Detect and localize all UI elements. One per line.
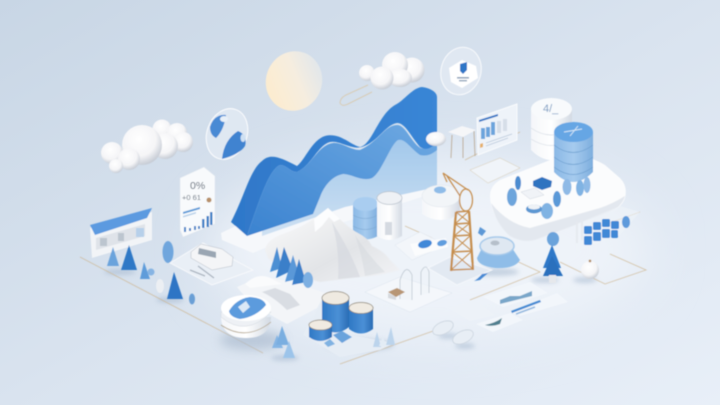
- sun disc: [257, 43, 331, 119]
- blue cube array: [576, 206, 640, 252]
- left cloud: [101, 120, 193, 173]
- white ball on glass platform: [581, 260, 599, 279]
- floor glow: [210, 160, 650, 340]
- house: [90, 208, 152, 258]
- bottom stat cards: [448, 273, 568, 332]
- floating badge: [435, 43, 487, 99]
- snow bowl: [220, 295, 284, 350]
- snow plateau: [237, 276, 334, 324]
- round white building: [422, 185, 460, 220]
- cylinder label: 4/_: [543, 103, 559, 115]
- blue mini tree near machine: [478, 227, 486, 236]
- scene objects: [80, 43, 646, 364]
- isometric dashboard panel with stool: [448, 104, 517, 158]
- card value text: +0 61: [182, 193, 201, 202]
- tower platform: [428, 257, 492, 285]
- blue pill platform: [395, 232, 448, 260]
- low glass panel: [470, 158, 520, 183]
- glass platform with arches: [365, 267, 452, 312]
- teardrop lens: [199, 103, 255, 165]
- blue round machine: [477, 237, 520, 268]
- orange lattice tower: [443, 173, 473, 271]
- card percent text: 0%: [190, 180, 205, 192]
- blue stacked cylinders: [554, 122, 593, 182]
- small wave puff: [426, 132, 446, 146]
- object shadows: [104, 268, 597, 361]
- ice crystals: [373, 327, 395, 347]
- left pine trees: [107, 241, 195, 304]
- right white platform: [490, 155, 626, 241]
- top cloud with loop outline: [340, 52, 424, 105]
- wave ribbon top: [231, 87, 437, 236]
- small bottom trees: [272, 326, 295, 358]
- blue and grey storage tanks: [353, 192, 402, 240]
- back light wave panel: [262, 125, 437, 236]
- large dark pine with balloon: [543, 232, 563, 283]
- glass lens objects: [430, 318, 476, 347]
- wave front face: [247, 125, 437, 236]
- white stacked cylinders: [531, 98, 572, 160]
- wave base slab: [221, 170, 437, 253]
- mountain: [265, 208, 400, 282]
- floor gold guide lines: [80, 132, 646, 364]
- phone stats card: [180, 167, 215, 237]
- blue pine cluster: [270, 247, 313, 288]
- car platform: [170, 243, 253, 285]
- blue barrel group: [303, 292, 395, 357]
- right platform mini trees: [507, 176, 590, 219]
